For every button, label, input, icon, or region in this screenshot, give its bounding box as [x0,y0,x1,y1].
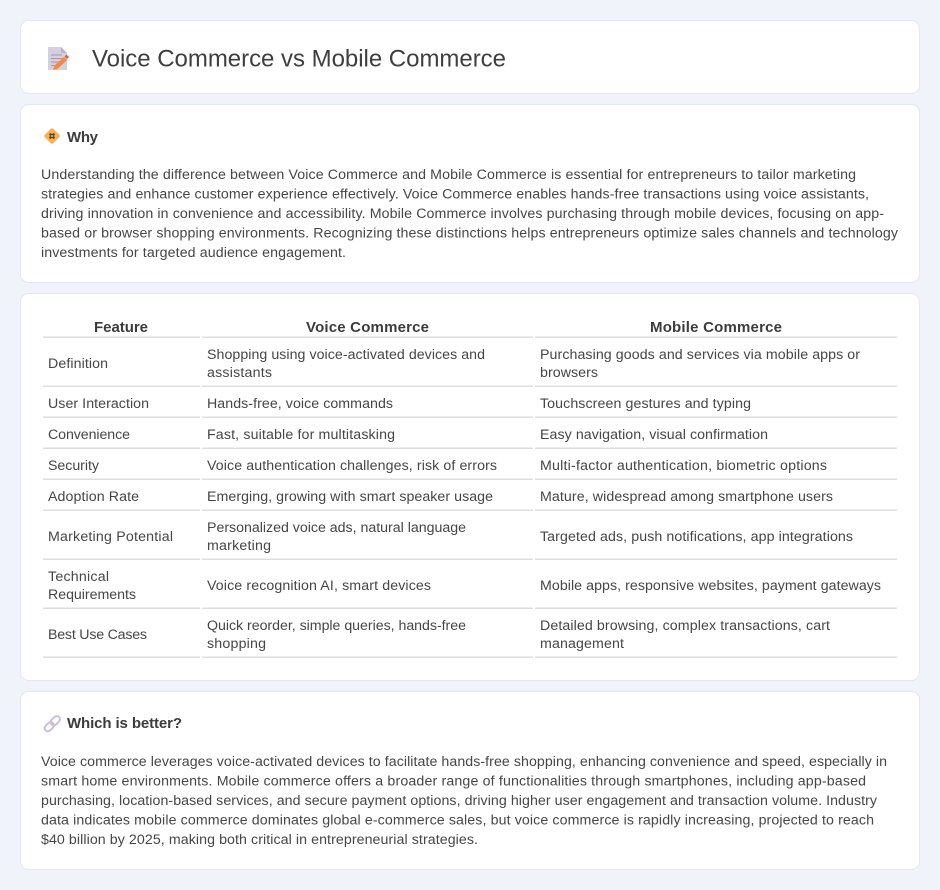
row: best use cases: Best Use Cases [48,627,147,643]
row: best use cases: management [540,636,624,652]
table header row: Mobile Commerce [650,319,782,336]
row: security: Security [48,458,100,474]
row: security: Multi-factor authentication, biometric options [540,458,827,474]
row: marketing potential: Targeted ads, push notifications, app integrations [540,529,853,545]
table header row: Feature [94,319,148,336]
text block: why: strategies and enhance customer experience effectively. Voice Commerce enables hands-free transactions using voice assistants, [41,186,869,202]
panel: which is better [20,692,920,870]
row: marketing potential: Marketing Potential [48,529,173,545]
row: user interaction: Hands-free, voice commands [207,396,393,412]
row: best use cases: Quick reorder, simple queries, hands-free [207,618,466,634]
icon: orange diamond [44,128,60,144]
row: convenience: Easy navigation, visual confirmation [540,427,768,443]
row: marketing potential [43,520,897,560]
text block: which is better: Voice commerce leverages voice-activated devices to facilitate hands-free shopping, enhancing convenience and speed, especially in [41,754,887,770]
table header row: Voice Commerce [306,319,429,336]
row: technical requirements: Technical [48,569,109,585]
panel: header [20,20,920,94]
row: technical requirements: Requirements [48,587,136,603]
icon: chain link [43,715,61,733]
row: definition: assistants [207,365,272,381]
row: technical requirements: Mobile apps, responsive websites, payment gateways [540,578,881,594]
row: convenience [43,427,897,449]
row: best use cases: shopping [207,636,266,652]
row: definition: Shopping using voice-activated devices and [207,347,485,363]
text block: why: driving innovation in convenience and accessibility. Mobile Commerce involves purchasing through mobile devices, focusing on app- [41,206,884,222]
row: marketing potential: Personalized voice ads, natural language [207,520,466,536]
text block: which is better: purchasing, location-based services, and secure payment options, driving higher user engagement and transaction volume. Industry [41,793,878,809]
heading: which is better: Which is better? [67,715,182,732]
row: adoption rate: Mature, widespread among smartphone users [540,489,833,505]
row: technical requirements [43,569,897,609]
row: marketing potential: marketing [207,538,271,554]
text block: why [41,167,899,261]
row: security [43,458,897,480]
table header row [43,319,897,338]
text block: which is better: smart home environments. Mobile commerce offers a broader range of functionalities through smartphones, including app-based [41,774,866,790]
text block: which is better: $40 billion by 2025, making both critical in entrepreneurial strategies. [41,832,478,848]
panel: comparison table [20,294,920,680]
text block: why: based or browser shopping environments. Recognizing these distinctions helps entrepreneurs optimize sales channels and technology [41,226,899,242]
row: best use cases: Detailed browsing, complex transactions, cart [540,618,830,634]
row: user interaction [43,396,897,418]
row: security: Voice authentication challenges, risk of errors [207,458,497,474]
row: technical requirements: Voice recognition AI, smart devices [207,578,431,594]
text block: why: Understanding the difference between Voice Commerce and Mobile Commerce is essential for entrepreneurs to tailor marketing [41,167,856,183]
row: best use cases [43,618,897,658]
row: definition [43,347,897,387]
row: convenience: Fast, suitable for multitasking [207,427,395,443]
row: adoption rate: Adoption Rate [48,489,139,505]
row: user interaction: Touchscreen gestures and typing [540,396,751,412]
title: Voice Commerce vs Mobile Commerce [92,46,506,72]
row: convenience: Convenience [48,427,130,443]
row: definition: Purchasing goods and services via mobile apps or [540,347,860,363]
icon: document with pencil [48,47,69,70]
row: adoption rate: Emerging, growing with smart speaker usage [207,489,493,505]
row: definition: browsers [540,365,598,381]
row: adoption rate [43,489,897,511]
text block: which is better [41,754,887,848]
row: definition: Definition [48,356,108,372]
row: user interaction: User Interaction [48,396,149,412]
text block: which is better: data indicates mobile commerce dominates global e-commerce sales, but voice commerce is rapidly increasing, projected to reach [41,812,874,828]
text block: why: investments for targeted audience engagement. [41,245,346,261]
panel: why [20,104,920,282]
heading: why: Why [67,129,99,146]
